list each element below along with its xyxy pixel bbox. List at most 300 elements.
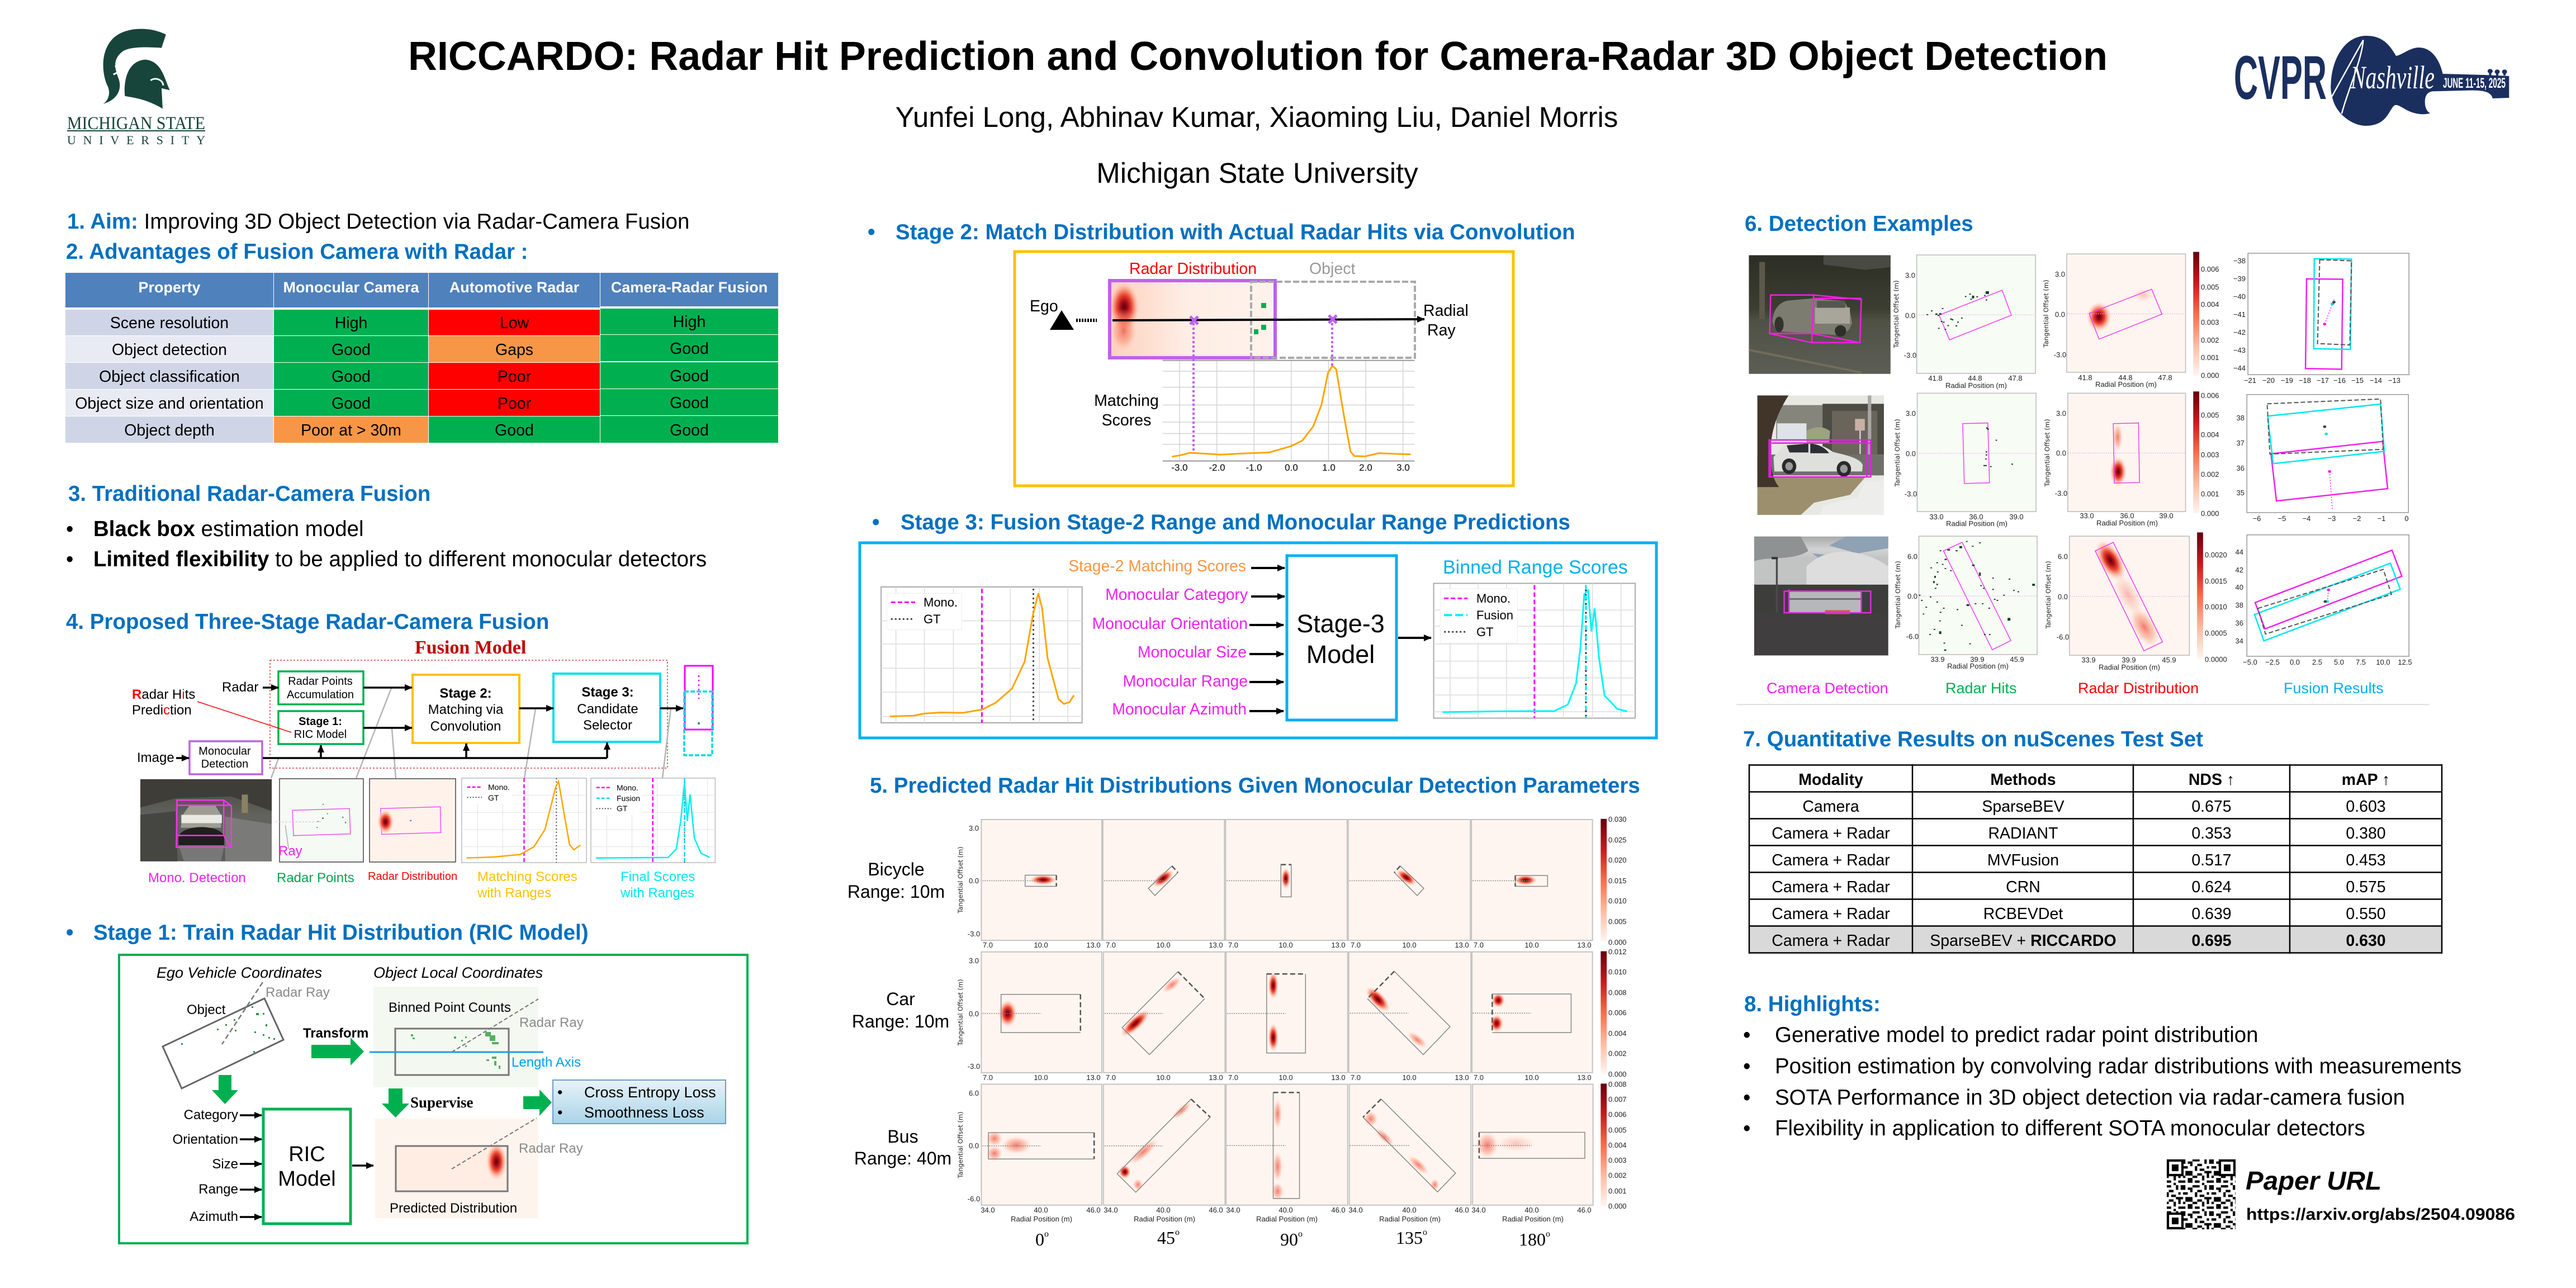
axis tick labels: 3.0: [969, 824, 979, 832]
box: radar points accumulation: Radar Points: [288, 675, 353, 688]
table: sensor advantages: Poor: [498, 395, 532, 413]
table: sensor advantages: Scene resolution: [110, 314, 229, 332]
input labels: Monocular Range: [1123, 672, 1248, 690]
tick labels: radar plots: -6.0: [1906, 632, 1919, 641]
tick labels: radar plots: 3.0: [2056, 409, 2066, 418]
highlights bullets: SOTA Performance in 3D object detection via radar-camera fusion: [1775, 1086, 2405, 1110]
tick labels: radar plots: Radial Position (m): [2096, 519, 2158, 527]
panel: stage 1 RIC model: Ego Vehicle Coordinates: [157, 964, 322, 981]
table: sensor advantages: Poor: [498, 368, 532, 386]
colorbar labels: 0.001: [2201, 353, 2219, 362]
column angle labels: o: [1423, 1228, 1427, 1237]
axis tick labels: 40.0: [1156, 1206, 1171, 1214]
authors: Yunfei Long, Abhinav Kumar, Xiaoming Liu, Daniel Morris: [896, 101, 1618, 133]
box: stage 2: [413, 675, 519, 743]
box: stage-3 model: Model: [1306, 640, 1375, 669]
axis tick labels: 10.0: [1156, 941, 1171, 949]
box: stage 3: Stage 3:: [581, 685, 634, 700]
axis tick labels: Radial Position (m): [1256, 1215, 1318, 1223]
fusion tick labels: −39: [2233, 274, 2246, 283]
chart: mono matching: Mono.: [924, 595, 958, 609]
captions: Radar Points: [277, 870, 354, 886]
captions: Matching Scores: [477, 869, 577, 884]
tick labels: radar plots: Radial Position (m): [1947, 662, 2009, 670]
axis tick labels: -3.0: [968, 1062, 980, 1071]
tick labels: radar plots: -3.0: [1904, 351, 1916, 359]
box: stage 3: Selector: [583, 718, 632, 733]
tick labels: radar plots: 47.8: [2158, 373, 2172, 382]
captions: Radar Hits: [1945, 680, 2017, 697]
fusion tick labels: −2.5: [2265, 658, 2280, 666]
panel: binned point counts: Binned Point Counts: [389, 1000, 511, 1015]
tick labels: radar plots: 41.8: [2078, 373, 2092, 382]
box: stage 1 RIC model: [278, 711, 363, 744]
table: quantitative results: mAP ↑: [2342, 771, 2390, 789]
plot: matching scores: [462, 778, 586, 863]
fusion tick labels: −5: [2278, 514, 2286, 523]
row labels: Bus: [887, 1126, 918, 1147]
callout: losses: Cross Entropy Loss: [584, 1084, 716, 1101]
axis tick labels: 34.0: [1348, 1206, 1363, 1214]
plot: radar points: [276, 779, 363, 862]
axis tick labels: -6.0: [968, 1195, 980, 1203]
y axis titles: Tangential Offset (m): [1894, 561, 1902, 629]
box: stage-3 model: [1287, 556, 1396, 720]
axis tick labels: 13.0: [1209, 1073, 1223, 1082]
axis tick labels: 34.0: [981, 1206, 995, 1214]
fusion tick labels: 38: [2237, 414, 2244, 422]
colorbar labels: 0.005: [1608, 1126, 1627, 1134]
box outlines: [988, 865, 1585, 1199]
table: sensor advantages: Poor at > 30m: [301, 422, 401, 439]
axis tick labels: 13.0: [1331, 941, 1346, 949]
section 7 heading: 7. Quantitative Results on nuScenes Test Set: [1743, 727, 2203, 751]
box: RIC model: Model: [278, 1167, 336, 1191]
labels: inputs: Prediction: [132, 703, 192, 718]
box: stage 3: Candidate: [577, 702, 638, 717]
highlights bullets: •: [1743, 1054, 1750, 1078]
captions: Radar Distribution: [2078, 680, 2199, 697]
captions: Camera Detection: [1767, 680, 1888, 697]
matching score chart: 0.0: [1285, 462, 1298, 473]
section 6 heading: 6. Detection Examples: [1745, 212, 1973, 236]
fusion tick labels: −4: [2303, 514, 2310, 523]
object in ego coordinates: Radar Ray: [266, 985, 330, 1000]
inputs: Range: [198, 1182, 238, 1197]
axis tick labels: Radial Position (m): [1379, 1215, 1441, 1223]
tick labels: radar plots: 33.9: [2081, 656, 2096, 664]
row labels: Bicycle: [868, 859, 925, 879]
tick labels: radar plots: 0.0: [2056, 449, 2066, 457]
colorbars: [1600, 819, 1607, 1206]
axis tick labels: 10.0: [1524, 941, 1539, 949]
matching score chart: -1.0: [1246, 462, 1262, 473]
fusion tick labels: 34: [2236, 637, 2243, 645]
tick labels: radar plots: -6.0: [2057, 633, 2069, 641]
colorbar labels: 0.015: [1608, 877, 1627, 885]
colorbar labels: 0.010: [1608, 968, 1627, 976]
tick labels: radar plots: 36.0: [1969, 513, 1983, 521]
plot: radar points: Ray: [278, 844, 302, 859]
colorbar labels: 0.010: [1608, 897, 1627, 905]
fusion tick labels: 38: [2236, 601, 2243, 609]
inputs: [173, 1107, 238, 1224]
tick labels: radar plots: 0.0: [1905, 311, 1915, 320]
green arrows: [212, 1075, 552, 1117]
radar hits: [1254, 303, 1266, 334]
fusion tick labels: 36: [2236, 619, 2243, 627]
tick labels: radar plots: 3.0: [1905, 271, 1915, 280]
axis tick labels: 13.0: [1577, 1073, 1592, 1082]
table: sensor advantages: Good: [332, 341, 371, 359]
tick labels: radar plots: 45.9: [2010, 655, 2024, 664]
connector lines: [271, 688, 671, 778]
tick labels: radar plots: Radial Position (m): [1945, 381, 2007, 390]
tick labels: radar plots: -3.0: [1905, 490, 1917, 498]
input labels: Monocular Size: [1138, 643, 1247, 661]
transform arrow: [303, 1026, 368, 1066]
table: quantitative results: Camera + Radar: [1772, 932, 1890, 950]
camera images: [1749, 255, 1891, 655]
panels background: [981, 820, 1593, 1205]
fusion tick labels: −40: [2233, 292, 2246, 301]
colorbar labels: 0.0015: [2205, 577, 2227, 585]
table: quantitative results: 0.517: [2191, 851, 2232, 869]
paper URL: [2246, 1166, 2515, 1224]
tick labels: radar plots: 3.0: [1906, 409, 1916, 418]
table: sensor advantages: High: [335, 314, 367, 332]
logo: Michigan State University: UNIVERSITY: [67, 133, 205, 147]
fusion tick labels: −3: [2328, 514, 2336, 523]
axis tick labels: 40.0: [1278, 1206, 1293, 1214]
section 3 heading: 3. Traditional Radar-Camera Fusion: [68, 482, 430, 506]
colorbar labels: 0.000: [2201, 371, 2219, 380]
radar hits plots: [1917, 255, 2037, 655]
panel: binned point counts: [370, 987, 584, 1087]
axis tick labels: 46.0: [1331, 1206, 1346, 1214]
colorbar labels: 0.0000: [2205, 655, 2227, 664]
table: sensor advantages: Good: [670, 367, 709, 385]
colorbar labels: 0.0005: [2205, 629, 2227, 637]
axis tick labels: Radial Position (m): [1502, 1215, 1564, 1223]
box: monocular detection: Detection: [201, 758, 248, 770]
colorbar labels: 0.030: [1608, 815, 1627, 823]
panel: predicted distribution: Radar Ray: [519, 1141, 583, 1156]
axis tick labels: 7.0: [1106, 1073, 1116, 1082]
colorbar labels: 0.006: [1608, 1008, 1627, 1017]
fusion tick labels: −42: [2233, 328, 2246, 337]
axis tick labels: 7.0: [1474, 1073, 1484, 1082]
axis tick labels: 46.0: [1455, 1206, 1469, 1214]
input labels: Monocular Category: [1105, 585, 1248, 603]
colorbar labels: 0.003: [2201, 318, 2219, 326]
fusion tick labels: −6: [2253, 514, 2261, 523]
input labels: Monocular Orientation: [1092, 614, 1248, 632]
tick labels: radar plots: 41.8: [1928, 374, 1943, 382]
stage 3 heading: •: [872, 510, 879, 534]
tick labels: radar plots: 33.0: [2080, 512, 2094, 520]
highlights bullets: Generative model to predict radar point distribution: [1775, 1023, 2258, 1047]
box: stage 1 RIC model: RIC Model: [294, 728, 347, 741]
fusion results plots: [2247, 253, 2409, 656]
tick labels: radar plots: 0.0: [1907, 592, 1917, 600]
column angle labels: 90: [1280, 1229, 1298, 1249]
plot: final scores: GT: [617, 804, 628, 813]
axis tick labels: 34.0: [1471, 1206, 1486, 1214]
axis tick labels: 3.0: [969, 956, 979, 965]
axis tick labels: 7.0: [1106, 941, 1116, 949]
box: monocular detection: [190, 741, 262, 774]
panel: predicted distribution: Predicted Distribution: [390, 1201, 517, 1216]
matching score chart: 3.0: [1396, 462, 1410, 473]
table: quantitative results: 0.695: [2191, 932, 2232, 950]
colorbar labels: 0.002: [1608, 1049, 1627, 1058]
fusion tick labels: −38: [2233, 257, 2246, 265]
section 3 bullets: Limited flexibility to be applied to different monocular detectors: [93, 547, 707, 571]
y axis titles: Tangential Offset (m): [1892, 280, 1900, 349]
column angle labels: o: [1044, 1229, 1049, 1239]
plot: matching scores: Mono.: [488, 783, 510, 792]
table: quantitative results: MVFusion: [1987, 851, 2059, 869]
panel: predicted distribution: [375, 1118, 583, 1218]
fusion tick labels: −41: [2233, 310, 2246, 319]
stage 2 heading: •: [868, 220, 875, 244]
axis tick labels: 34.0: [1226, 1206, 1240, 1214]
output boxes: [684, 666, 713, 755]
axis tick labels: 13.0: [1086, 1073, 1101, 1082]
table: quantitative results: 0.630: [2346, 932, 2386, 950]
matching score chart: -2.0: [1209, 462, 1225, 473]
input arrows: [1249, 568, 1431, 711]
input labels: [1068, 557, 1248, 718]
tick labels: radar plots: 33.0: [1929, 513, 1944, 521]
plot: final scores: [591, 778, 715, 863]
stage 1 heading: •: [66, 921, 73, 945]
tick labels: radar plots: Radial Position (m): [1946, 519, 2007, 528]
axis tick labels: 13.0: [1331, 1073, 1346, 1082]
y axis titles: Tangential Offset (m): [956, 1111, 964, 1178]
fusion tick labels: −13: [2388, 376, 2400, 385]
table: sensor advantages: High: [673, 313, 705, 331]
highlights bullets: •: [1743, 1023, 1750, 1047]
axis tick labels: 0.0: [969, 1010, 979, 1018]
colorbar labels: 0.001: [1608, 1187, 1627, 1195]
table: sensor advantages: Property: [138, 279, 201, 296]
object outline: [1251, 282, 1415, 358]
table: quantitative results: Camera + Radar: [1772, 878, 1890, 896]
logo: CVPR Nashville guitar: Nashville: [2350, 59, 2435, 96]
fusion tick labels: −1: [2378, 514, 2385, 523]
colorbar labels: 0.004: [1608, 1029, 1627, 1038]
labels: inputs: Radar Hits: [132, 687, 195, 702]
fusion tick labels: 0.0: [2290, 658, 2300, 666]
tick labels: radar plots: 6.0: [1907, 552, 1917, 561]
fusion tick labels: −20: [2262, 376, 2275, 385]
table: quantitative results: NDS ↑: [2189, 771, 2234, 789]
tick labels: radar plots: Radial Position (m): [2095, 380, 2157, 389]
tick labels: radar plots: 36.0: [2120, 512, 2134, 520]
table: sensor advantages: Object depth: [124, 422, 215, 439]
QR code: [2167, 1159, 2236, 1229]
radar hit points: [1926, 291, 1989, 330]
highlights bullets: Flexibility in application to different SOTA monocular detectors: [1775, 1116, 2365, 1140]
axis tick labels: 10.0: [1402, 1073, 1417, 1082]
stage 2 heading: Stage 2: Match Distribution with Actual Radar Hits via Convolution: [896, 220, 1575, 244]
colorbar labels: 0.008: [1608, 1080, 1627, 1088]
paper URL: https://arxiv.org/abs/2504.09086: [2246, 1205, 2515, 1224]
axis tick labels: 7.0: [1351, 941, 1361, 949]
table: quantitative results: RCBEVDet: [1983, 905, 2063, 923]
fusion tick labels: 5.0: [2334, 658, 2344, 666]
stage 1 heading: Stage 1: Train Radar Hit Distribution (RIC Model): [93, 921, 589, 945]
table: quantitative results: SparseBEV: [1982, 798, 2064, 816]
column angle labels: o: [1546, 1229, 1550, 1239]
axis tick labels: 13.0: [1209, 941, 1223, 949]
transform arrow: Transform: [303, 1026, 368, 1041]
section 3 bullets: •: [66, 517, 73, 541]
captions: Final Scores: [621, 869, 695, 884]
colorbar labels: 0.000: [1608, 1070, 1627, 1078]
chart: mono matching: [881, 587, 1082, 723]
colorbar labels: 0.005: [2201, 411, 2219, 419]
logo: CVPR Nashville guitar: CVPR: [2234, 44, 2327, 112]
radial ray: [1050, 310, 1424, 330]
y axis titles: Tangential Offset (m): [956, 846, 964, 913]
highlights bullets: •: [1743, 1086, 1750, 1110]
matching score chart: [1163, 315, 1414, 473]
logo: CVPR Nashville guitar: [2234, 36, 2509, 126]
panel: stage 3: [860, 543, 1656, 738]
table: sensor advantages: Low: [500, 314, 529, 332]
diagram: three-stage fusion model: [132, 637, 715, 901]
tick labels: radar plots: 39.9: [1970, 655, 1985, 664]
row labels: Range: 10m: [852, 1011, 949, 1031]
tick labels: radar plots: 39.0: [2009, 513, 2024, 521]
tick labels: radar plots: 33.9: [1930, 655, 1945, 664]
table: quantitative results: 0.453: [2346, 851, 2386, 869]
axis tick labels: 10.0: [1278, 941, 1293, 949]
tick labels: radar plots: -3.0: [2055, 489, 2067, 498]
inputs: Category: [184, 1107, 238, 1123]
table: sensor advantages: Good: [332, 368, 371, 386]
y axis titles: Tangential Offset (m): [2043, 419, 2051, 487]
colorbar labels: 0.001: [2201, 490, 2219, 498]
axis tick labels: 46.0: [1209, 1206, 1223, 1214]
axis tick labels: 40.0: [1034, 1206, 1048, 1214]
section 3 bullets: [66, 517, 707, 571]
logo: CVPR Nashville guitar: JUNE 11-15, 2025: [2443, 75, 2506, 91]
fusion tick labels: −16: [2333, 376, 2346, 385]
fusion tick labels: −44: [2233, 364, 2246, 372]
axis tick labels: 10.0: [1034, 941, 1048, 949]
tick labels: radar plots: -3.0: [2054, 351, 2066, 359]
box: radar points accumulation: Accumulation: [287, 689, 354, 701]
colorbar labels: 0.006: [2201, 265, 2219, 273]
box: RIC model: [263, 1109, 351, 1224]
axis tick labels: 34.0: [1104, 1206, 1118, 1214]
heat blobs: [998, 867, 1538, 1179]
axis tick labels: -3.0: [968, 930, 980, 938]
section 4 heading: 4. Proposed Three-Stage Radar-Camera Fusion: [66, 610, 549, 634]
y axis titles: [1892, 280, 2052, 629]
paper URL: Paper URL: [2246, 1166, 2381, 1195]
arrows: [176, 688, 683, 758]
panel: stage 1 RIC model: Object Local Coordinates: [373, 964, 543, 981]
panel: stage 2: Ray: [1427, 321, 1456, 339]
axis tick labels: 10.0: [1402, 941, 1417, 949]
table: quantitative results: SparseBEV + RICCARDO: [1930, 932, 2116, 950]
image: mono detection: [140, 779, 272, 861]
section 2 heading: 2. Advantages of Fusion Camera with Radar :: [66, 240, 528, 264]
captions: with Ranges: [620, 886, 694, 901]
colorbar labels: 0.0010: [2205, 603, 2227, 611]
table: quantitative results: Camera + Radar: [1772, 825, 1890, 842]
fusion tick labels: 37: [2237, 439, 2244, 447]
table: sensor advantages: Gaps: [495, 341, 533, 359]
table: sensor advantages: [65, 273, 778, 443]
box: stage 2: Matching via: [428, 702, 504, 717]
tick labels: radar plots: 0.0: [2055, 310, 2065, 319]
fusion tick labels: 36: [2237, 464, 2244, 472]
colorbar labels: 0.004: [1608, 1141, 1627, 1149]
column angle labels: o: [1298, 1229, 1303, 1239]
table: quantitative results: Camera + Radar: [1772, 905, 1890, 923]
matching score chart: 1.0: [1322, 462, 1336, 473]
box: stage 1 RIC model: Stage 1:: [299, 716, 342, 728]
box: stage 3: [553, 674, 660, 742]
fusion tick labels: −17: [2317, 376, 2329, 385]
camera image 1: [1749, 255, 1891, 374]
labels: inputs: [132, 680, 258, 765]
column angle labels: 135: [1396, 1228, 1423, 1248]
tick labels: radar plots: [1904, 270, 2176, 671]
logo: Michigan State University: MICHIGAN STATE: [67, 113, 205, 134]
table: quantitative results: RADIANT: [1988, 825, 2058, 842]
radar distribution plots: [2067, 254, 2189, 655]
panel: stage 2: Object: [1309, 260, 1355, 278]
panel: detection examples: [1736, 252, 2429, 704]
colorbar labels: 0.004: [2201, 300, 2219, 309]
table: quantitative results: CRN: [2006, 878, 2040, 896]
heat blobs: [2086, 288, 2167, 651]
table: sensor advantages: Camera-Radar Fusion: [611, 279, 768, 296]
tick labels: radar plots: 45.9: [2162, 656, 2176, 664]
table: quantitative results: 0.575: [2346, 878, 2386, 896]
row labels: Car: [886, 989, 915, 1009]
fusion tick labels: −21: [2244, 376, 2256, 385]
colorbar labels: 0.0020: [2205, 551, 2227, 559]
box: stage-3 model: Stage-3: [1296, 609, 1385, 638]
y axis titles: Tangential Offset (m): [1893, 419, 1901, 487]
colorbar labels: 0.008: [1608, 988, 1627, 997]
object in ego coordinates: [163, 982, 330, 1088]
axis tick labels: 0.0: [969, 1142, 979, 1150]
camera image 3: [1754, 537, 1888, 655]
fusion tick labels: −2: [2353, 514, 2361, 523]
fusion tick labels: 44: [2236, 548, 2243, 556]
shapes in source coordinates: [1736, 252, 2429, 704]
radial rays: [982, 881, 1532, 1146]
input labels: Stage-2 Matching Scores: [1068, 557, 1246, 575]
axis tick labels: 46.0: [1577, 1206, 1592, 1214]
axis tick labels: 40.0: [1402, 1206, 1417, 1214]
row labels: Range: 40m: [854, 1148, 951, 1168]
callout: losses: Smoothness Loss: [584, 1104, 704, 1121]
tick labels: radar plots: 3.0: [2055, 270, 2065, 278]
tick labels: radar plots: Radial Position (m): [2099, 663, 2160, 671]
panel: stage 2: [1015, 252, 1513, 486]
colorbar labels: 0.000: [1608, 1202, 1627, 1210]
